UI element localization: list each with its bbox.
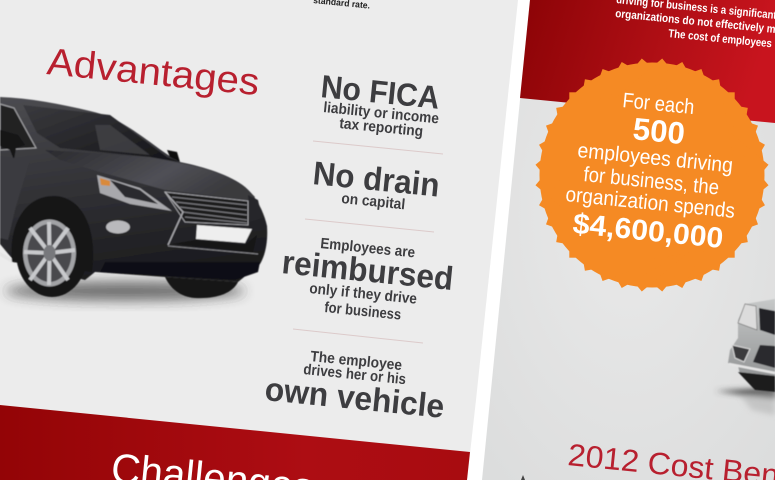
panel: left page xyxy=(0,0,518,480)
rear wheel xyxy=(165,277,238,298)
red header xyxy=(520,0,775,123)
text block: own vehicle: own vehicle xyxy=(263,370,446,425)
badge text: organization spends xyxy=(565,183,736,223)
text block: No FICA: tax reporting xyxy=(339,115,424,140)
panel: right page xyxy=(482,0,775,480)
door panel xyxy=(0,156,30,240)
text block: No FICA: liability or income xyxy=(323,99,440,128)
divider lines xyxy=(293,141,443,343)
text block: No drain: No drain xyxy=(311,154,441,204)
text block: reimbursed: reimbursed xyxy=(280,243,455,297)
grille xyxy=(165,192,248,225)
side mirror xyxy=(0,130,25,160)
badge text: $4,600,000 xyxy=(571,208,725,255)
text block: reimbursed xyxy=(280,235,455,324)
text block: own vehicle: The employee xyxy=(310,348,403,374)
text block: No FICA xyxy=(319,68,441,140)
badge: cost callout xyxy=(535,58,769,292)
wheel arch xyxy=(11,196,93,272)
badge text: for business, the xyxy=(583,163,720,199)
text block: own vehicle xyxy=(263,348,446,425)
text block: reimbursed: only if they drive xyxy=(309,280,418,308)
text block: own vehicle: drives her or his xyxy=(303,361,407,388)
headlight xyxy=(97,175,172,211)
illustration: silver car xyxy=(715,299,775,415)
fog lamp xyxy=(106,220,130,234)
illustration: dark SUV xyxy=(0,97,267,301)
badge text xyxy=(565,89,736,255)
text block: No drain: on capital xyxy=(341,190,406,213)
badge text: employees driving xyxy=(577,139,734,177)
licence plate xyxy=(196,225,252,243)
windshield xyxy=(23,105,180,162)
badge text: 500 xyxy=(631,111,687,151)
lower grille xyxy=(172,235,257,252)
hood xyxy=(45,150,255,200)
text block: No FICA: No FICA xyxy=(319,68,441,116)
front wheel xyxy=(16,207,88,297)
badge text: For each xyxy=(622,89,695,119)
side window xyxy=(0,104,36,150)
text block: reimbursed: Employees are xyxy=(320,235,416,261)
banner: Challenges xyxy=(0,405,470,480)
starburst shape xyxy=(535,58,769,292)
heading: Advantages: Advantages xyxy=(45,41,261,104)
text block: reimbursed: for business xyxy=(324,299,402,324)
